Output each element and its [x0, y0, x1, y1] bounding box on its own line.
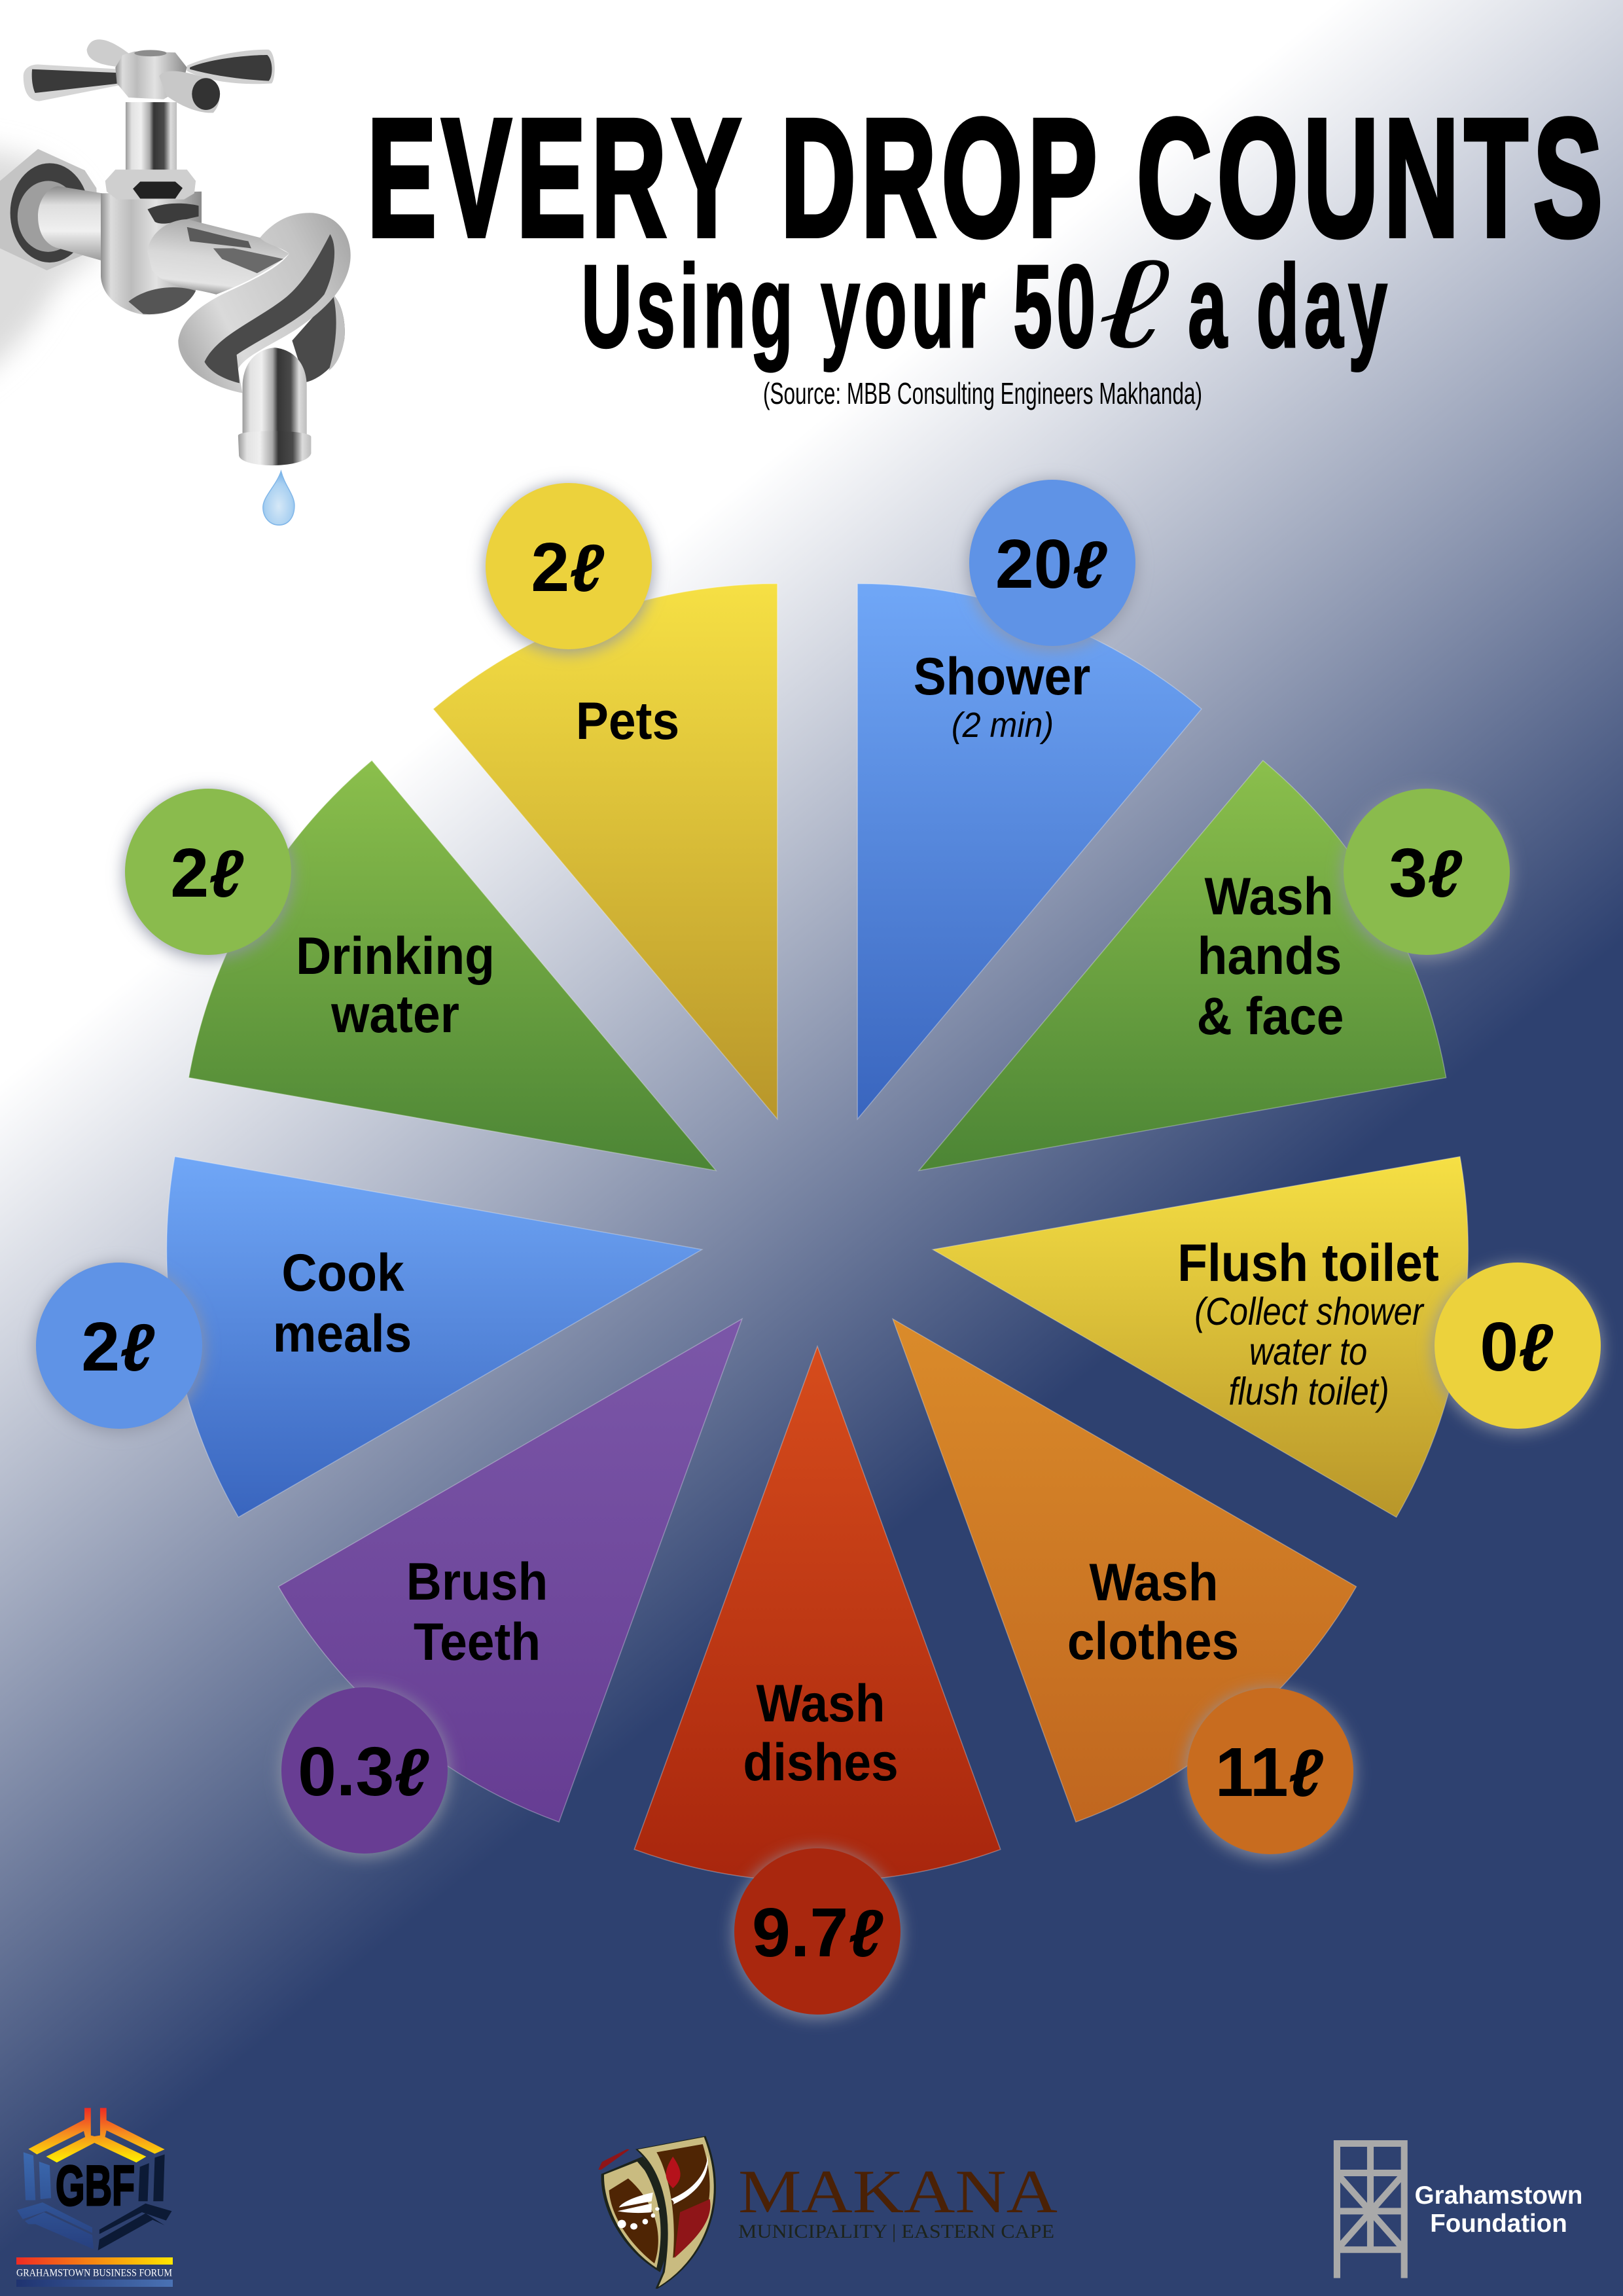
organisation name — [1415, 2181, 1582, 2238]
wall nut — [0, 149, 102, 270]
amount badge — [124, 789, 293, 959]
icon: water drop — [263, 471, 294, 525]
amount badge — [1186, 1688, 1355, 1858]
logo initials: GBF — [56, 2155, 135, 2217]
label: Wash — [1089, 1552, 1219, 1612]
sector — [188, 761, 716, 1170]
sector — [919, 761, 1446, 1170]
title: EVERY DROP COUNTS — [367, 84, 1608, 272]
label — [296, 925, 495, 1044]
label: water to — [1249, 1329, 1367, 1373]
panel: drinking water — [124, 761, 716, 1170]
sector — [167, 1157, 702, 1517]
sector — [893, 1319, 1356, 1822]
label: Teeth — [414, 1611, 541, 1672]
subtitle — [581, 235, 1392, 374]
knot — [147, 213, 351, 393]
amount badge: 20ℓ — [995, 526, 1107, 603]
tower icon — [1334, 2140, 1408, 2278]
label: (2 min) — [952, 706, 1054, 745]
amount badge — [484, 483, 653, 653]
logo: Grahamstown Foundation — [1334, 2140, 1582, 2278]
label: Cook — [281, 1242, 404, 1302]
amount badge — [733, 1848, 902, 2018]
panel: wash clothes — [893, 1319, 1356, 1858]
label: Drinking — [296, 925, 495, 986]
amount badge: 11ℓ — [1215, 1734, 1323, 1811]
stem — [126, 102, 177, 177]
logo bar — [16, 2280, 173, 2287]
label — [914, 646, 1090, 745]
amount badge — [1433, 1263, 1602, 1433]
sector — [634, 1346, 1001, 1882]
label: meals — [273, 1303, 412, 1363]
icon: knotted tap with water drop — [0, 39, 351, 525]
label: dishes — [743, 1732, 899, 1792]
tap handle — [24, 39, 275, 113]
label — [1067, 1552, 1239, 1671]
label — [1197, 866, 1344, 1046]
sector — [857, 584, 1202, 1119]
logo: Makana Municipality — [599, 2136, 1058, 2289]
shield — [599, 2136, 715, 2289]
label: Wash — [1204, 866, 1334, 926]
logo mark — [17, 2108, 171, 2250]
label: water — [330, 984, 459, 1044]
amount badge: 3ℓ — [1389, 834, 1462, 912]
label: flush toilet) — [1228, 1369, 1389, 1413]
tagline: MUNICIPALITY | EASTERN CAPE — [738, 2221, 1054, 2242]
label: Wash — [756, 1673, 885, 1733]
panel: wash hands and face — [919, 761, 1511, 1170]
amount badge: 2ℓ — [81, 1308, 154, 1386]
label: Pets — [576, 691, 679, 751]
label — [273, 1242, 412, 1363]
panel: wash dishes — [634, 1346, 1001, 2018]
label — [743, 1673, 899, 1792]
label: hands — [1198, 925, 1342, 986]
logo bar — [16, 2257, 173, 2265]
panel: pets — [433, 483, 777, 1119]
panel: flush toilet — [933, 1157, 1602, 1517]
amount badge — [280, 1687, 449, 1857]
source note: (Source: MBB Consulting Engineers Makhanda) — [763, 376, 1202, 410]
tap body — [101, 192, 202, 315]
panel: shower — [857, 480, 1202, 1119]
label: Brush — [406, 1551, 548, 1611]
amount badge: 9.7ℓ — [752, 1894, 883, 1971]
amount badge: 2ℓ — [531, 529, 604, 606]
label — [406, 1551, 548, 1672]
amount badge: 2ℓ — [170, 834, 243, 912]
subtitle: a day — [1188, 242, 1392, 372]
sector — [933, 1157, 1468, 1517]
organisation name: Foundation — [1430, 2210, 1567, 2238]
amount badge — [968, 480, 1137, 650]
organisation name: Grahamstown — [1415, 2181, 1582, 2210]
label: clothes — [1067, 1611, 1239, 1671]
label — [1177, 1232, 1439, 1413]
label: Shower — [914, 646, 1090, 706]
wordmark: MAKANA — [738, 2158, 1058, 2226]
sector — [433, 584, 777, 1119]
panel: brush teeth — [279, 1319, 742, 1857]
logo name: GRAHAMSTOWN BUSINESS FORUM — [16, 2267, 172, 2279]
subtitle: ℓ — [1100, 235, 1169, 374]
amount badge — [35, 1263, 204, 1433]
label: Flush toilet — [1177, 1232, 1439, 1293]
amount badge: 0ℓ — [1480, 1308, 1553, 1386]
amount badge: 0.3ℓ — [298, 1733, 429, 1810]
spout — [243, 348, 307, 435]
label: (Collect shower — [1194, 1289, 1425, 1333]
logo: Grahamstown Business Forum — [16, 2108, 173, 2287]
stem nut — [105, 170, 196, 200]
amount badge — [1342, 789, 1511, 959]
sector — [279, 1319, 742, 1822]
spout collar — [238, 431, 311, 465]
subtitle: Using your 50 — [581, 242, 1099, 372]
panel: cook meals — [35, 1157, 702, 1517]
label: & face — [1197, 986, 1344, 1046]
